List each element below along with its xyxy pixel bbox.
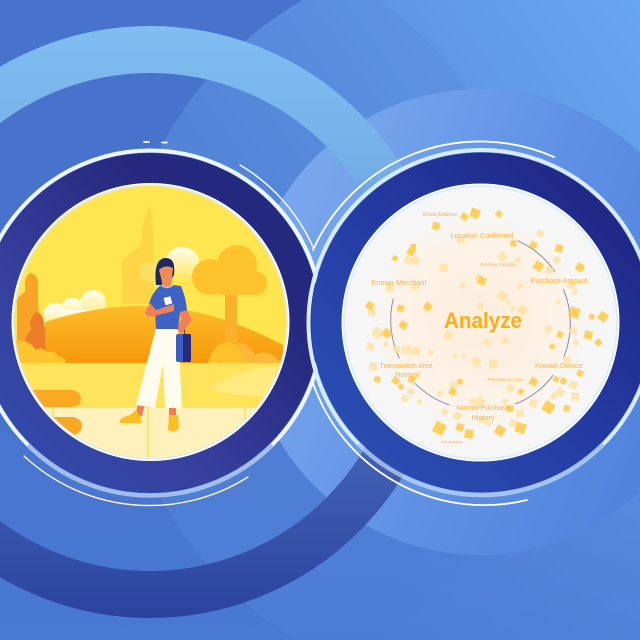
thin white arcs <box>24 141 554 506</box>
orange bushes <box>17 273 40 345</box>
top <box>149 285 187 329</box>
data labels: Known Device <box>535 361 583 370</box>
woman figure <box>120 258 192 432</box>
sun <box>164 247 200 283</box>
left shrub <box>14 340 66 364</box>
data labels: Location Confirmed <box>450 231 514 240</box>
hill <box>45 306 283 363</box>
data labels <box>372 212 588 444</box>
face <box>159 266 173 289</box>
data labels: Account Age <box>442 440 462 444</box>
data labels: History <box>471 413 495 422</box>
large ring around left circle <box>0 50 422 594</box>
arm front <box>145 303 174 317</box>
shoes <box>120 410 141 423</box>
trousers <box>136 328 182 408</box>
data labels: Purchase Category <box>480 262 516 267</box>
data labels: Previous Account <box>488 377 523 382</box>
left illustration circle <box>12 183 290 461</box>
data labels: Normal Purchase <box>456 403 510 412</box>
hair <box>155 258 174 285</box>
bag strap <box>179 286 185 336</box>
city building <box>122 205 153 304</box>
right analyze circle <box>342 184 620 462</box>
bench <box>32 390 81 407</box>
data labels: Email Address <box>423 212 457 218</box>
left ring <box>0 151 323 496</box>
arm back <box>176 306 192 333</box>
collar <box>161 285 173 288</box>
data labels: Known Merchant <box>372 278 427 287</box>
bag <box>176 334 191 362</box>
label Analyze: Analyze <box>444 308 522 333</box>
scattered squares <box>365 207 609 439</box>
cloud <box>44 290 106 324</box>
right ring <box>309 150 640 495</box>
phone <box>164 296 172 305</box>
legs <box>135 404 176 416</box>
circular connector arcs <box>391 241 570 405</box>
ground <box>20 363 280 458</box>
tree <box>192 245 282 364</box>
data labels: Transaction time, <box>380 361 434 370</box>
data labels: Normal <box>395 370 419 379</box>
data labels: Purchase Amount <box>530 276 588 285</box>
